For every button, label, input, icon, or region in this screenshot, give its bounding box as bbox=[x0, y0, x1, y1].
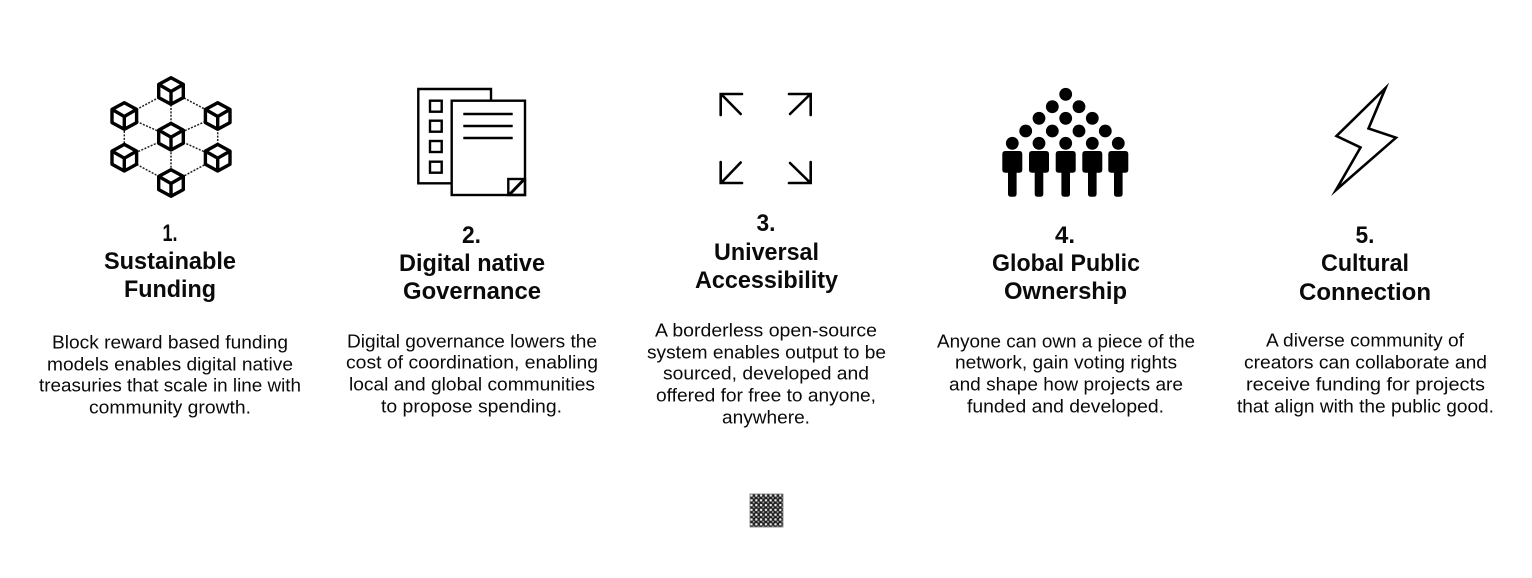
text: universal accessibility description: A borderless open-source bbox=[655, 321, 877, 341]
heading: digital native governance: Governance bbox=[403, 278, 541, 305]
text: sustainable funding description: Block reward based funding bbox=[52, 333, 288, 353]
heading: global public ownership: Ownership bbox=[1004, 278, 1127, 305]
text: digital governance description: local and global communities bbox=[349, 375, 595, 395]
heading: universal accessibility: Accessibility bbox=[695, 267, 839, 294]
panel: global public ownership bbox=[937, 88, 1195, 417]
icon: crowd of people with pyramid of dots bbox=[1002, 88, 1128, 197]
icon: documents with checklist bbox=[418, 89, 525, 195]
text: universal accessibility description: anywhere. bbox=[722, 408, 810, 428]
text: digital governance description: Digital governance lowers the bbox=[347, 332, 597, 352]
text: cultural connection description: receive funding for projects bbox=[1246, 375, 1485, 395]
heading: digital native governance: 2. bbox=[462, 222, 481, 249]
text: global public ownership description: funded and developed. bbox=[967, 397, 1164, 417]
panel: cultural connection bbox=[1237, 88, 1494, 417]
heading: sustainable funding: Funding bbox=[124, 276, 216, 303]
text: global public ownership description: network, gain voting rights bbox=[955, 353, 1177, 373]
heading: universal accessibility: Universal bbox=[714, 239, 819, 266]
text: sustainable funding description bbox=[39, 333, 301, 418]
icon: four outward arrows bbox=[721, 94, 811, 183]
icon: connected blockchain cubes bbox=[112, 78, 230, 196]
text: global public ownership description bbox=[937, 332, 1195, 417]
heading: universal accessibility bbox=[695, 210, 839, 294]
heading: cultural connection: Connection bbox=[1299, 279, 1431, 306]
text: sustainable funding description: models enables digital native bbox=[47, 355, 293, 375]
heading: cultural connection bbox=[1299, 222, 1431, 306]
text: cultural connection description bbox=[1237, 331, 1494, 417]
heading: universal accessibility: 3. bbox=[756, 210, 776, 237]
heading: global public ownership: Global Public bbox=[992, 250, 1140, 277]
heading: global public ownership bbox=[992, 222, 1140, 305]
panel: sustainable funding bbox=[39, 78, 301, 418]
text: universal accessibility description: sourced, developed and bbox=[663, 364, 869, 384]
heading: sustainable funding: Sustainable bbox=[104, 248, 236, 275]
heading: cultural connection: Cultural bbox=[1321, 250, 1409, 277]
heading: sustainable funding bbox=[104, 220, 236, 303]
heading: cultural connection: 5. bbox=[1356, 222, 1374, 249]
icon: dithered checker logo square bbox=[750, 494, 783, 527]
heading: digital native governance bbox=[399, 222, 545, 305]
heading: digital native governance: Digital native bbox=[399, 250, 545, 277]
text: global public ownership description: and shape how projects are bbox=[949, 375, 1183, 395]
text: sustainable funding description: community growth. bbox=[89, 398, 251, 418]
text: digital governance description: cost of coordination, enabling bbox=[346, 353, 598, 373]
panel: digital native governance bbox=[346, 89, 598, 417]
heading: sustainable funding: 1. bbox=[162, 220, 178, 247]
text: cultural connection description: that align with the public good. bbox=[1237, 397, 1494, 417]
text: universal accessibility description bbox=[647, 321, 886, 428]
icon: lightning bolt bbox=[1336, 88, 1396, 190]
text: sustainable funding description: treasuries that scale in line with bbox=[39, 376, 301, 396]
text: digital governance description: to propose spending. bbox=[381, 397, 562, 417]
text: digital governance description bbox=[346, 332, 598, 417]
text: cultural connection description: creators can collaborate and bbox=[1244, 353, 1487, 373]
text: universal accessibility description: offered for free to anyone, bbox=[656, 386, 876, 406]
text: global public ownership description: Anyone can own a piece of the bbox=[937, 332, 1195, 352]
panel: universal accessibility bbox=[647, 94, 886, 428]
text: cultural connection description: A diverse community of bbox=[1266, 331, 1465, 351]
text: universal accessibility description: system enables output to be bbox=[647, 343, 886, 363]
heading: global public ownership: 4. bbox=[1055, 222, 1075, 249]
